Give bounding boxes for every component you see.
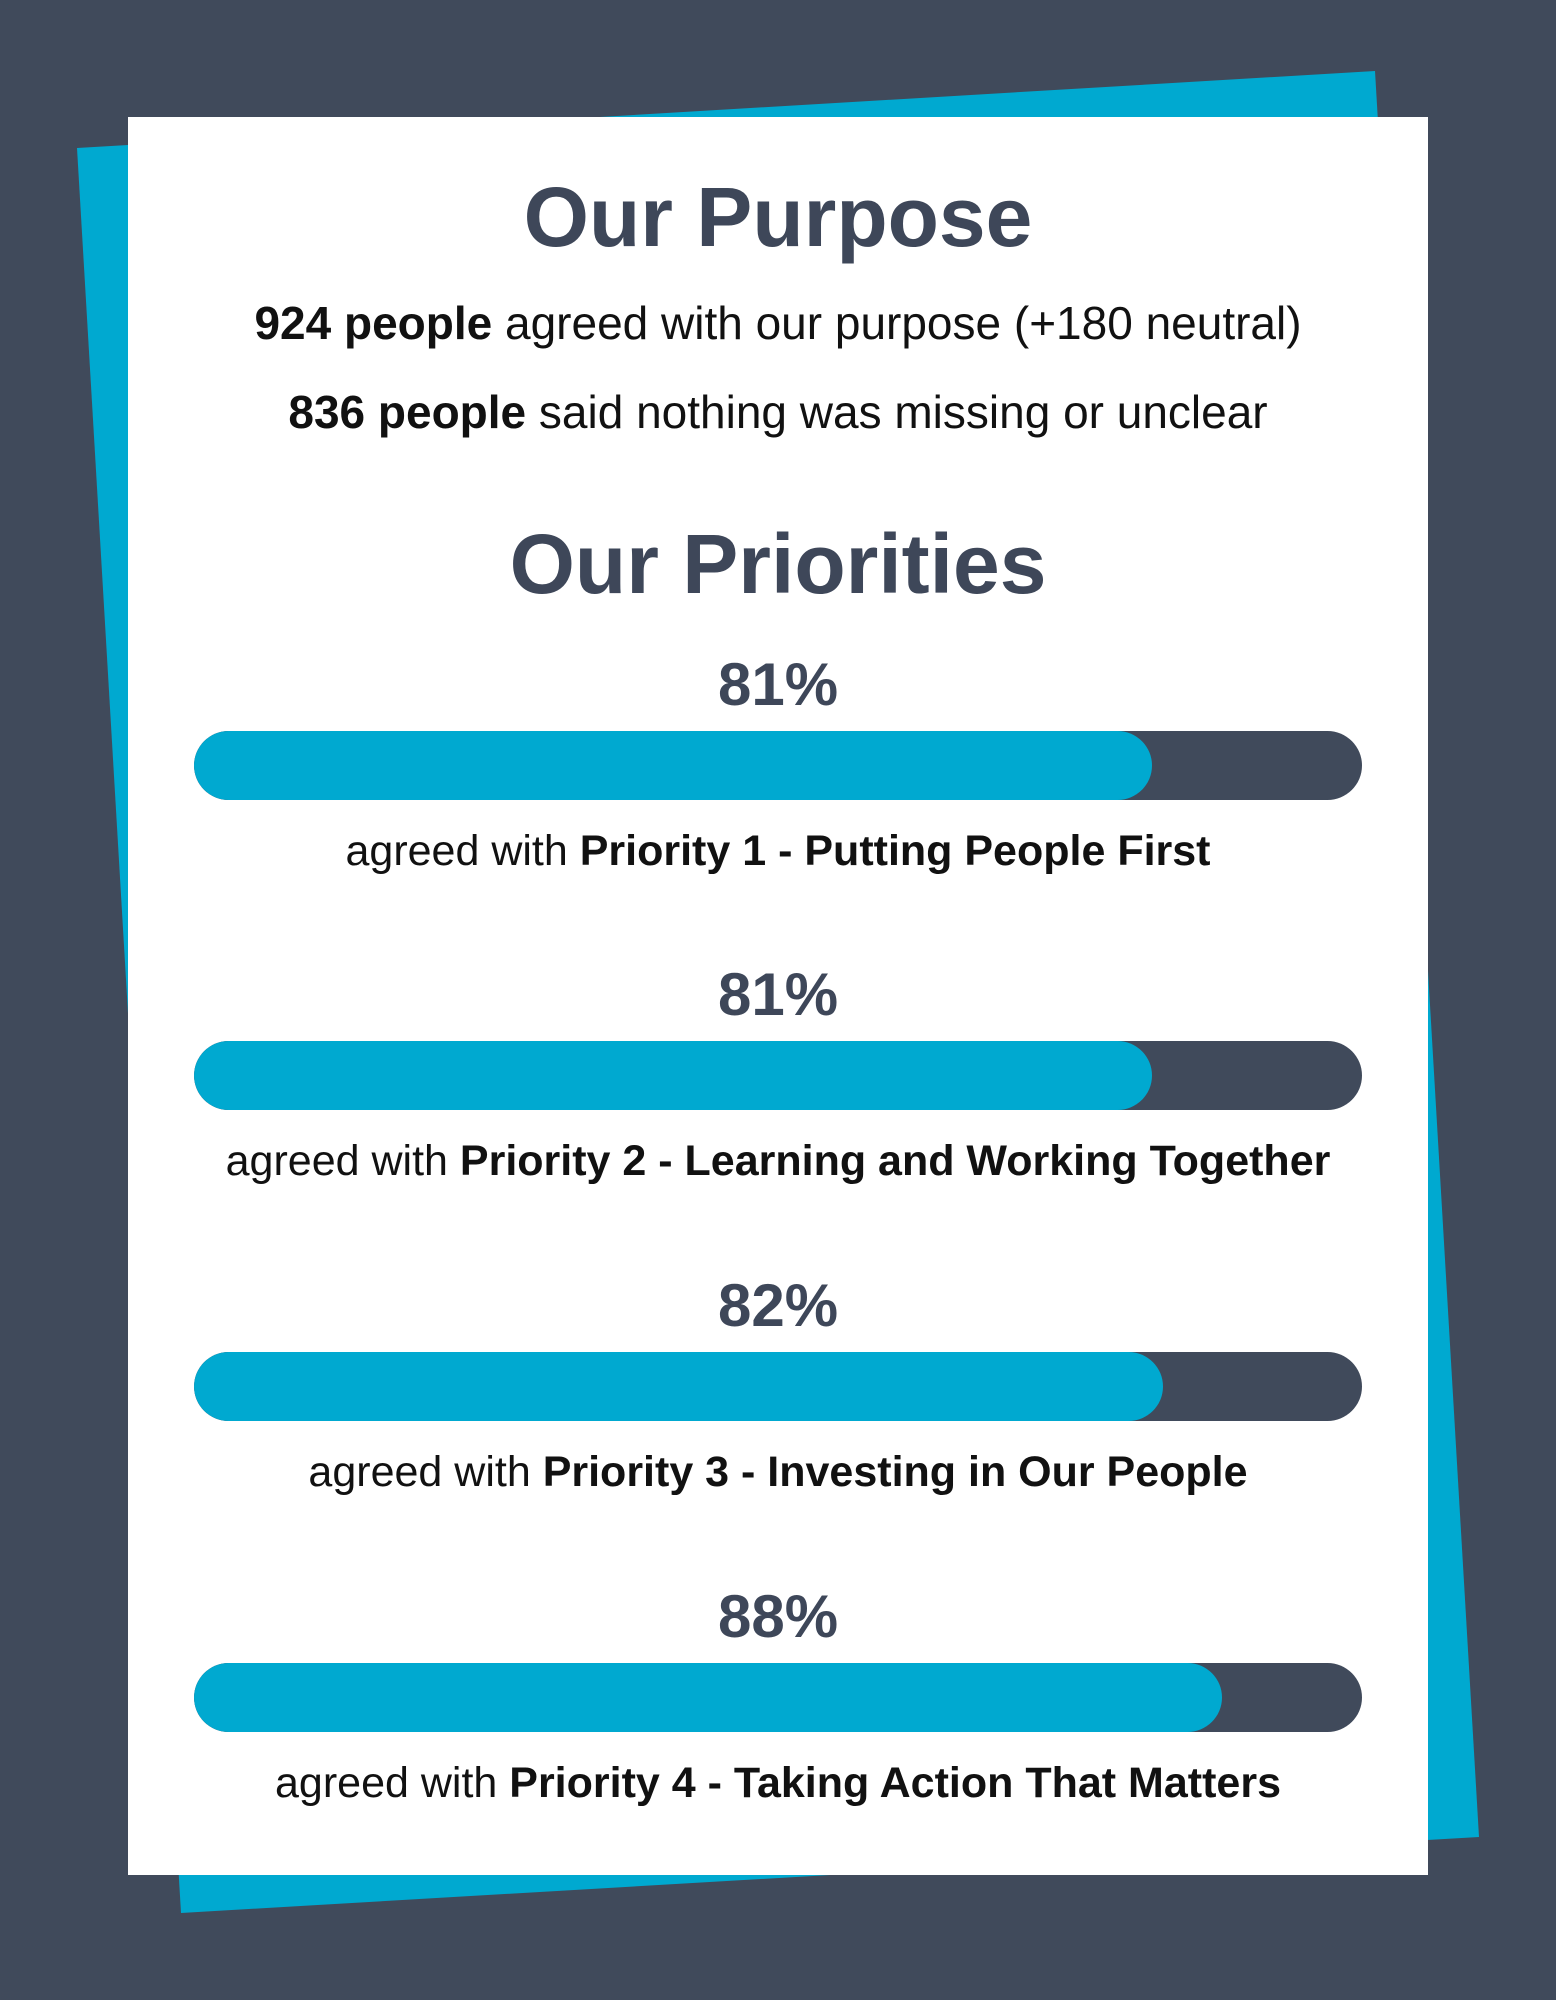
priority 4: [194, 1583, 1362, 1807]
panel: white card: [128, 117, 1428, 1875]
priority 3: [194, 1272, 1362, 1496]
label priority 4: agreed with Priority 4 - Taking Action That Matters: [275, 1759, 1281, 1807]
priority 1: [194, 651, 1362, 875]
title: Our Purpose: Our Purpose: [524, 170, 1032, 264]
bar chart: 82: [194, 1352, 1362, 1421]
priority 2: [194, 961, 1362, 1185]
percentage 88%: 88%: [718, 1583, 838, 1650]
percentage 81%: 81%: [718, 961, 838, 1028]
text: purpose stat 2: 836 people said nothing was missing or unclear: [288, 386, 1268, 438]
bar chart: 81: [194, 1041, 1362, 1110]
text: purpose stat 1: 924 people agreed with our purpose (+180 neutral): [254, 297, 1302, 349]
bar chart: 81: [194, 731, 1362, 800]
label priority 1: agreed with Priority 1 - Putting People First: [345, 827, 1210, 875]
bar chart: 88: [194, 1663, 1362, 1732]
title: Our Priorities: Our Priorities: [510, 517, 1046, 611]
percentage 82%: 82%: [718, 1272, 838, 1339]
label priority 3: agreed with Priority 3 - Investing in Our People: [308, 1448, 1248, 1496]
percentage 81%: 81%: [718, 651, 838, 718]
label priority 2: agreed with Priority 2 - Learning and Working Together: [226, 1137, 1330, 1185]
